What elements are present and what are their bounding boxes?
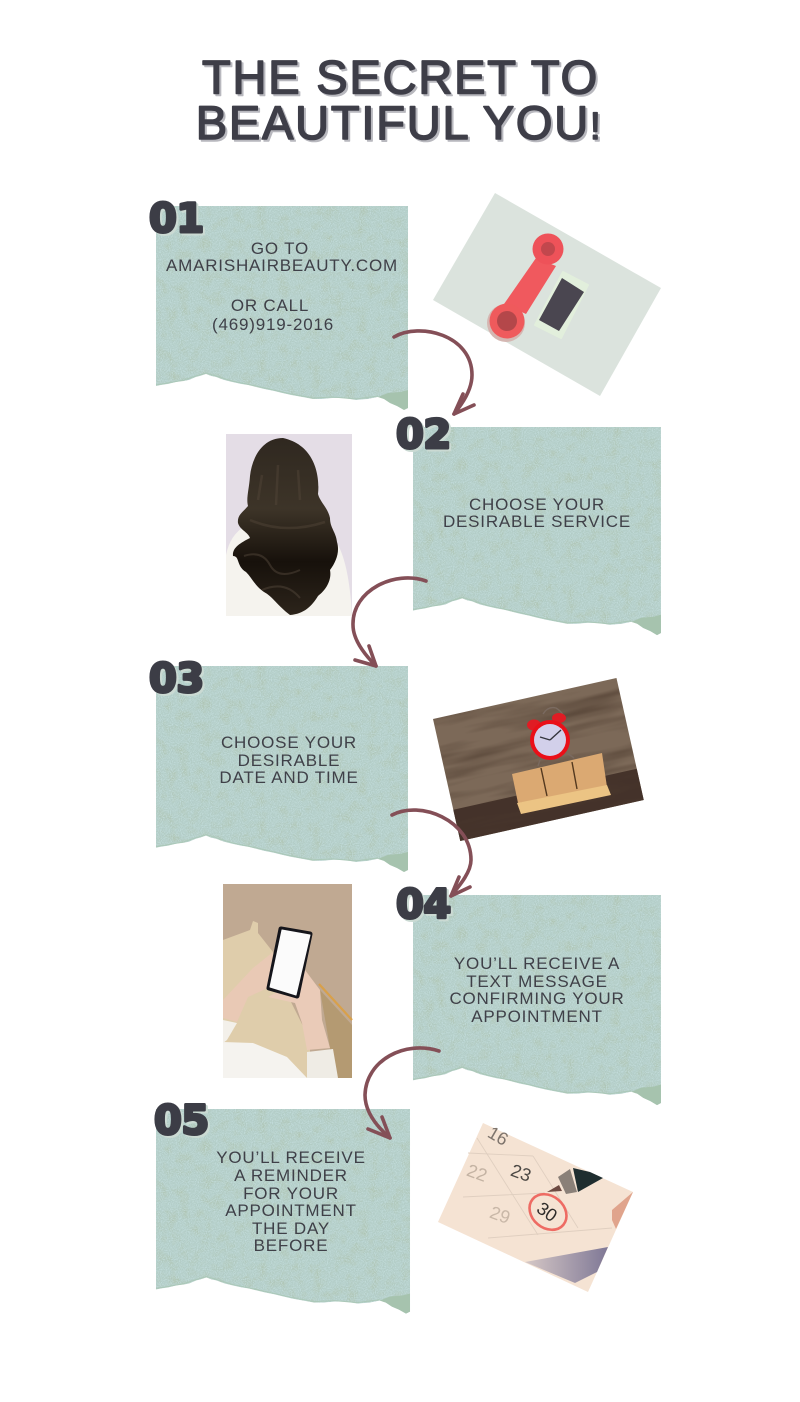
torn paper background 4: [413, 895, 661, 1105]
panel: step 4: [396, 882, 661, 1105]
panel: step 5: [154, 1098, 410, 1314]
step 2 text: [443, 495, 631, 531]
step 4 text: APPOINTMENT: [471, 1007, 603, 1026]
photo: hands holding a smartphone: [223, 884, 352, 1078]
step 5 text: APPOINTMENT: [225, 1201, 357, 1220]
step number 03: 03: [151, 658, 206, 704]
panel: step 2: [396, 412, 661, 635]
step 1 text: [166, 239, 398, 334]
photo: calendar with circled date: [438, 1122, 633, 1292]
step 3 text: DATE AND TIME: [219, 768, 359, 787]
title: BEAUTIFUL YOU!: [198, 98, 604, 151]
step 1 text: OR CALL: [231, 296, 309, 315]
step number 04: 04: [396, 882, 451, 928]
step 5 text: [216, 1148, 366, 1255]
step number 03: 03: [149, 656, 204, 702]
step 5 text: A REMINDER: [234, 1166, 348, 1185]
step 4 text: TEXT MESSAGE: [466, 972, 608, 991]
photo: calendar with circled date: 16: [484, 1122, 512, 1150]
title: [196, 50, 604, 151]
step 1 text: GO TO: [251, 239, 309, 258]
arrow: step 3 to step 4: [392, 810, 471, 896]
step number 04: 04: [398, 884, 453, 930]
torn paper background 3: [156, 666, 408, 872]
photo: calendar with circled date: 30: [533, 1198, 561, 1226]
step 2 text: DESIRABLE SERVICE: [443, 512, 631, 531]
torn paper background 2: [413, 427, 661, 635]
photo: calendar with circled date: 23: [508, 1160, 534, 1186]
step 4 text: [449, 954, 625, 1026]
photo: red telephone and smartphone: [433, 193, 661, 396]
step 4 text: CONFIRMING YOUR: [449, 989, 625, 1008]
arrow: step 2 to step 3: [353, 578, 426, 666]
step number 02: 02: [396, 412, 451, 458]
step 5 text: FOR YOUR: [243, 1184, 339, 1203]
step 3 text: [219, 733, 359, 787]
step number 05: 05: [156, 1100, 211, 1146]
arrow: step 4 to step 5: [365, 1048, 439, 1138]
photo: long dark wavy hair: [226, 434, 352, 616]
step 5 text: YOU’LL RECEIVE: [216, 1148, 366, 1167]
step number 02: 02: [398, 414, 453, 460]
arrow: step 1 to step 2: [394, 331, 474, 414]
step 5 text: BEFORE: [254, 1236, 328, 1255]
step 5 text: THE DAY: [252, 1219, 330, 1238]
step number 01: 01: [149, 196, 204, 242]
step 4 text: YOU’LL RECEIVE A: [454, 954, 620, 973]
torn paper background 5: [156, 1109, 410, 1314]
title: BEAUTIFUL YOU!: [196, 96, 602, 149]
title: THE SECRET TO: [204, 52, 601, 106]
step 2 text: CHOOSE YOUR: [469, 495, 605, 514]
step 1 text: AMARISHAIRBEAUTY.COM: [166, 256, 398, 275]
torn paper background 1: [156, 206, 408, 410]
photo: calendar with circled date: 22: [464, 1160, 490, 1186]
panel: step 3: [149, 656, 408, 872]
photo: calendar with circled date: 29: [487, 1202, 513, 1228]
step number 05: 05: [154, 1098, 209, 1144]
step 3 text: DESIRABLE: [238, 751, 340, 770]
title: THE SECRET TO: [202, 50, 599, 104]
photo: alarm clock on wooden blocks: [433, 678, 644, 841]
step number 01: 01: [151, 198, 206, 244]
step 3 text: CHOOSE YOUR: [221, 733, 357, 752]
panel: step 1: [149, 196, 408, 410]
step 1 text: (469)919-2016: [212, 315, 334, 334]
